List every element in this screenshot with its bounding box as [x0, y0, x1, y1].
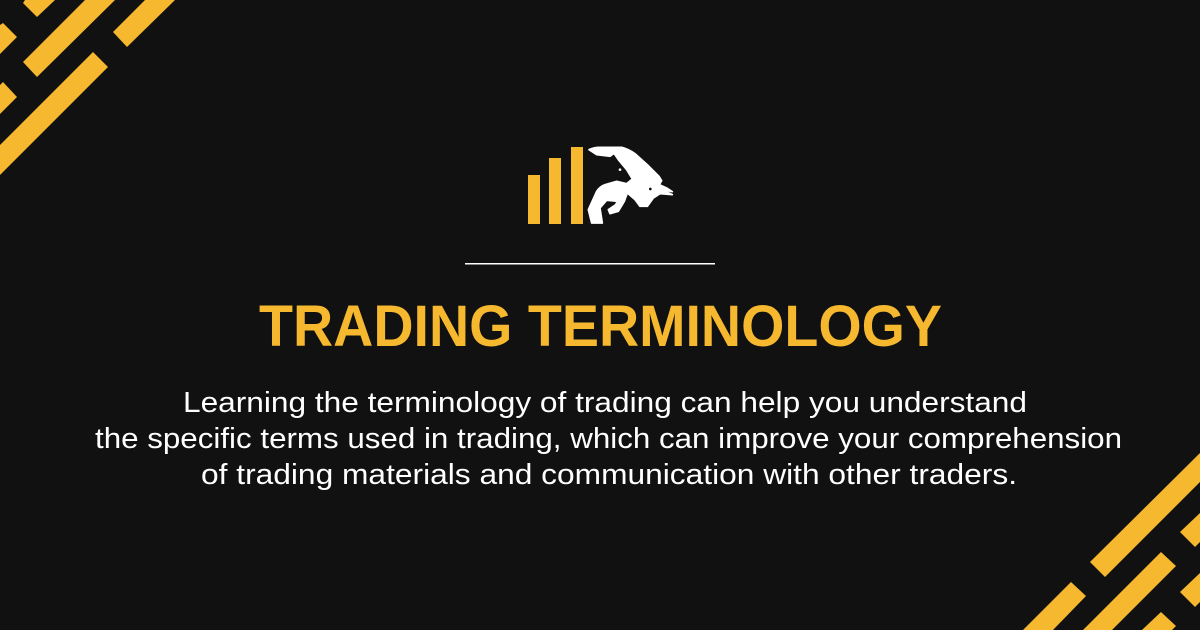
icon: charging bull — [588, 147, 672, 223]
title: TRADING TERMINOLOGY — [259, 294, 942, 359]
description text: Learning the terminology of trading can help you understand — [183, 387, 1027, 419]
top-left corner stripes — [0, 0, 175, 175]
logo: bars and bull — [528, 147, 672, 224]
description text — [95, 387, 1122, 491]
icon: rising bars — [528, 147, 583, 224]
description text: the specific terms used in trading, which can improve your comprehension — [95, 423, 1122, 455]
description text: of trading materials and communication with other traders. — [201, 459, 1017, 491]
bottom-right corner stripes — [1023, 453, 1200, 630]
